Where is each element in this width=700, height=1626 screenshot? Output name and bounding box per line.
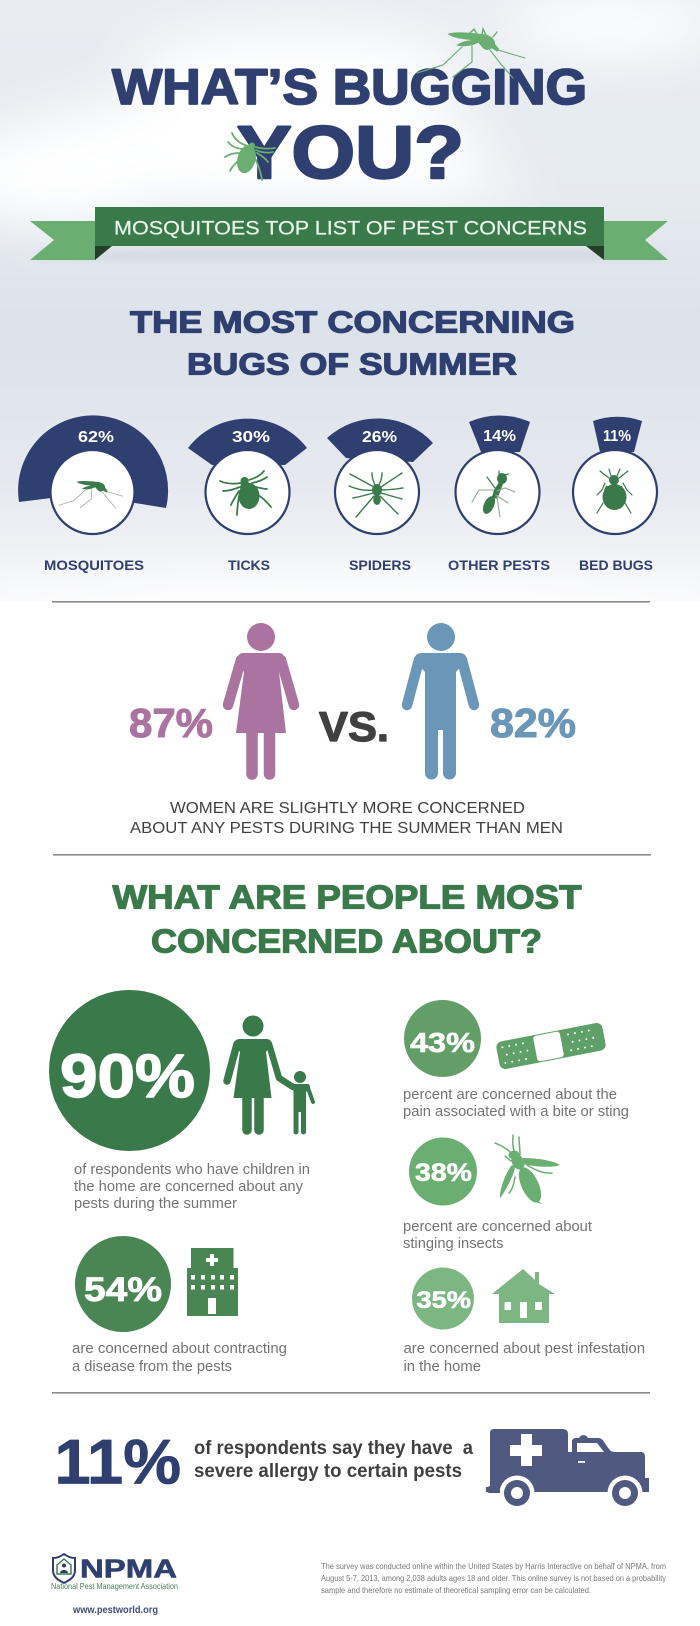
text: allergy description: severe allergy to certain pests — [194, 1461, 462, 1482]
panel: bed bugs 11%: 11% — [603, 428, 631, 445]
text: allergy description — [194, 1438, 473, 1482]
panel: 35% infestation: 35% — [416, 1287, 471, 1314]
survey disclaimer: August 5-7, 2013, among 2,038 adults ages 18 and older. This online survey is not based on a probability — [321, 1574, 667, 1583]
title line: what's bugging: WHAT’S BUGGING — [112, 59, 587, 115]
icon: ambulance — [480, 1429, 655, 1510]
text: 90% description: pests during the summer — [74, 1196, 237, 1212]
icon: mosquito — [58, 481, 123, 508]
text: 43% description: pain associated with a bite or sting — [403, 1104, 629, 1120]
panel: women vs men — [129, 623, 576, 837]
text: 35% description: in the home — [404, 1359, 481, 1375]
text: women more concerned — [130, 800, 563, 837]
panel: spiders 26%: 26% — [362, 429, 397, 446]
text: 43% description: percent are concerned about the — [403, 1087, 617, 1103]
panel: mosquitoes 62%: 62% — [78, 429, 114, 446]
icon: spider — [349, 473, 403, 517]
ribbon left tail — [30, 221, 96, 260]
heading: what are people most concerned about: CONCERNED ABOUT? — [151, 922, 542, 960]
panel: spiders 26% — [327, 418, 433, 573]
heading: what are people most concerned about — [112, 878, 582, 960]
vs: VS. — [319, 703, 389, 750]
text: 35% description: are concerned about pest infestation — [404, 1341, 645, 1357]
logo: NPMA — [51, 1554, 178, 1591]
panel: other pests 14% — [448, 416, 550, 573]
icon: tick on title — [225, 133, 275, 180]
text: 54% description: a disease from the pests — [72, 1359, 232, 1375]
website url: www.pestworld.org — [72, 1604, 158, 1616]
stat: 11%: 11% — [54, 1428, 181, 1498]
text: 90% description — [74, 1162, 310, 1212]
ribbon band — [95, 207, 604, 246]
icon: mother and child — [227, 1016, 313, 1132]
survey disclaimer — [321, 1562, 667, 1595]
text: 43% description — [403, 1087, 629, 1120]
panel: 38% stinging: 38% — [415, 1159, 472, 1187]
panel: 43% pain — [403, 1000, 629, 1120]
icon: wasp — [495, 1135, 560, 1206]
panel: ticks 30%: 30% — [232, 429, 270, 446]
stat: women 87%: 87% — [129, 700, 213, 746]
text: 54% description — [72, 1341, 287, 1375]
text: 35% description — [404, 1341, 645, 1375]
panel: other pests 14%: 14% — [483, 428, 516, 445]
ribbon banner — [30, 207, 668, 260]
icon: bed bug — [597, 469, 632, 513]
text: 38% description: percent are concerned about — [403, 1219, 592, 1235]
survey disclaimer: sample and therefore no estimate of theoretical sampling error can be calculated. — [321, 1586, 591, 1595]
stat: men 82%: 82% — [490, 700, 576, 746]
text: 90% description: of respondents who have children in — [74, 1162, 310, 1178]
text: 54% description: are concerned about contracting — [72, 1341, 287, 1357]
icon: bandage — [495, 1022, 607, 1070]
title line: you: YOU? — [237, 111, 464, 194]
icon: house — [492, 1269, 555, 1323]
icon: woman — [228, 623, 294, 774]
text: 38% description — [403, 1219, 592, 1252]
logo: NPMA: NPMA — [80, 1554, 177, 1584]
panel: 43% pain: 43% — [410, 1027, 475, 1058]
logo: NPMA: National Pest Management Association — [51, 1581, 178, 1591]
panel: bed bugs 11% — [573, 417, 657, 573]
title — [112, 59, 587, 194]
text: 38% description: stinging insects — [403, 1236, 504, 1252]
icon: shield — [53, 1554, 75, 1583]
text: 90% description: the home are concerned about any — [74, 1179, 304, 1195]
icon: mosquito on title — [417, 29, 525, 78]
icon: ant — [472, 471, 515, 517]
text: allergy description: of respondents say they have a — [194, 1438, 473, 1459]
panel: 54% disease: 54% — [84, 1271, 162, 1309]
heading: what are people most concerned about: WHAT ARE PEOPLE MOST — [112, 878, 582, 916]
panel: mosquitoes 62% — [18, 415, 168, 573]
heading: most concerning bugs: BUGS OF SUMMER — [187, 346, 517, 382]
panel: 90% children — [49, 990, 313, 1212]
label: spiders: SPIDERS — [349, 558, 411, 573]
icon: tick — [220, 471, 271, 515]
label: other pests: OTHER PESTS — [448, 558, 550, 573]
label: ticks: TICKS — [228, 558, 270, 573]
survey disclaimer: The survey was conducted online within the United States by Harris Interactive on behalf of NPMA, from — [321, 1562, 666, 1571]
ribbon right tail — [604, 221, 668, 260]
label: mosquitoes: MOSQUITOES — [44, 558, 144, 573]
panel: 38% stinging — [403, 1135, 592, 1252]
panel: 54% disease — [72, 1236, 287, 1375]
icon: man — [407, 623, 474, 773]
panel: 90% children: 90% — [60, 1042, 195, 1110]
heading: most concerning bugs — [130, 304, 575, 382]
label: bed bugs: BED BUGS — [579, 558, 653, 573]
panel: ticks 30% — [188, 419, 307, 573]
heading: most concerning bugs: THE MOST CONCERNING — [130, 304, 575, 340]
text: women more concerned: ABOUT ANY PESTS DURING THE SUMMER THAN MEN — [130, 820, 563, 837]
panel: 35% infestation — [404, 1268, 645, 1375]
panel: 11% allergy — [54, 1428, 655, 1510]
text: women more concerned: WOMEN ARE SLIGHTLY MORE CONCERNED — [170, 800, 525, 817]
icon: hospital — [187, 1248, 238, 1316]
ribbon text: MOSQUITOES TOP LIST OF PEST CONCERNS — [114, 218, 587, 240]
